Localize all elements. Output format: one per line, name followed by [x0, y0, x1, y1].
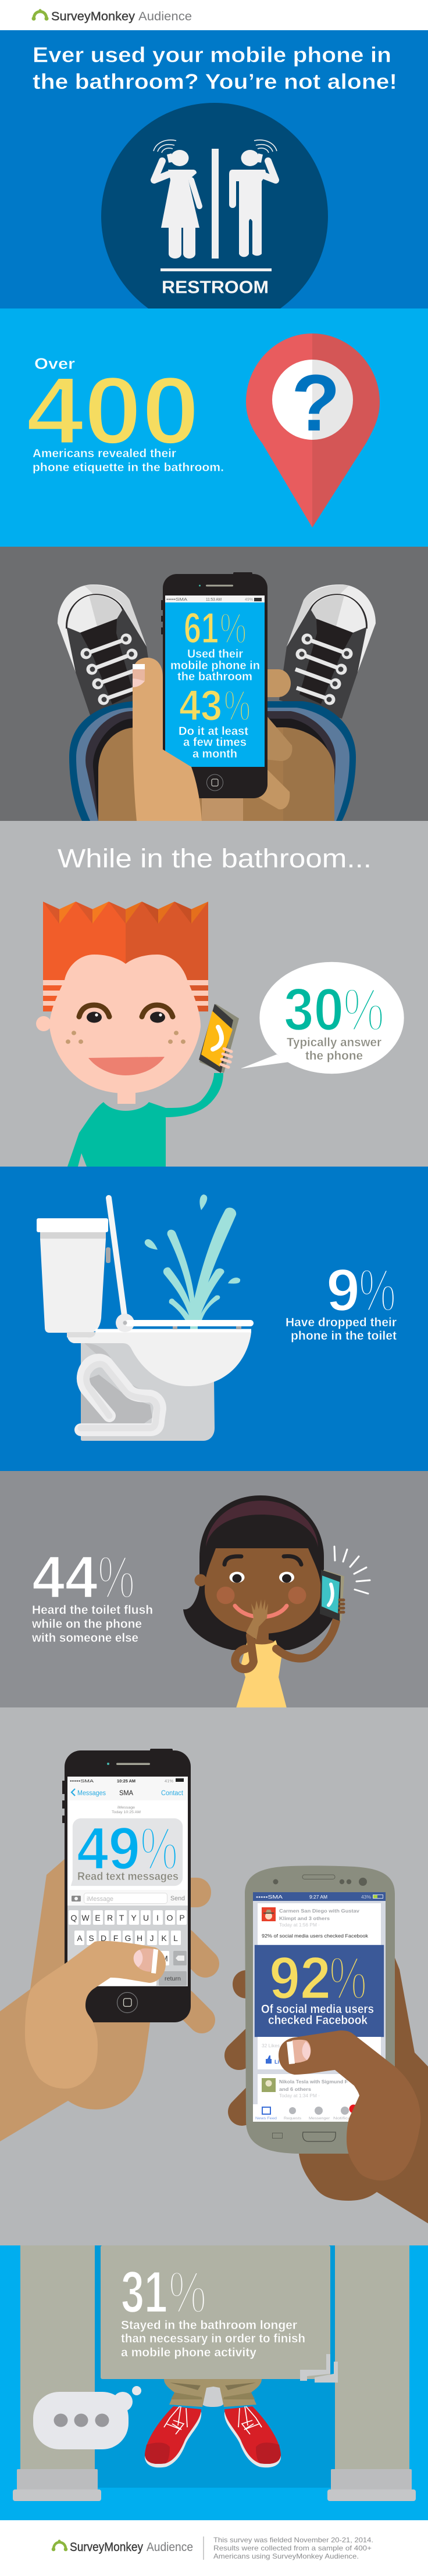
messages status bar: 41%: [165, 1778, 173, 1784]
stat: 9%: [286, 1257, 397, 1343]
hand thumb over the phone: [133, 658, 202, 821]
divider bar of the sign: [212, 149, 219, 259]
stat: 43%: a few times: [183, 736, 247, 749]
toilet seat and lid: [109, 1198, 254, 1332]
stat: 44%: with someone else: [31, 1631, 138, 1645]
character: red haired boy on phone: [36, 902, 239, 1167]
panel: title and restroom sign: [0, 30, 428, 308]
survey note: [213, 2536, 373, 2560]
facebook status bar: 43%: [361, 1895, 371, 1900]
features: [66, 1005, 186, 1075]
messages status bar: 10:25 AM: [117, 1778, 135, 1784]
hair: [43, 902, 208, 1028]
stat: 61%: Used their: [187, 648, 243, 661]
icon: woman with phone: [154, 140, 199, 259]
survey note: This survey was fielded November 20-21, 2014.: [213, 2536, 373, 2544]
keyboard: I: [156, 1913, 159, 1922]
post: carmen san diego: 92% of social media users checked Facebook: [262, 1933, 369, 1939]
face: [194, 1548, 321, 1634]
message bubble: 49%: 49: [77, 1815, 140, 1882]
keyboard: K: [161, 1933, 167, 1943]
phone: text messages: [62, 1749, 191, 2022]
post: nikola tesla: Nikola Tesla with Sigmund F: [279, 2079, 348, 2085]
stat: 43%: [179, 681, 251, 760]
post: carmen san diego: Carmen San Diego with Gustav: [279, 1908, 359, 1914]
keyboard: F: [113, 1933, 118, 1943]
header bar with SurveyMonkey logo: [0, 0, 428, 30]
post footer with likes: 32 Likes: [262, 2043, 280, 2048]
post footer with likes: Li: [274, 2059, 279, 2065]
survey note: Results were collected from a sample of 400+: [213, 2544, 372, 2552]
stat: 31%: a mobile phone activity: [121, 2346, 256, 2359]
teal shirt and arm: [67, 1073, 223, 1167]
legs and red shoes under door: [145, 2379, 281, 2467]
post: carmen san diego: Today at 1:56 PM ·: [279, 1922, 320, 1928]
panel: over 400 americans: [0, 308, 428, 547]
icon: map pin with question mark: ?: [291, 358, 340, 448]
face: [36, 955, 201, 1104]
facebook tab bar: Requests: [284, 2116, 302, 2121]
message bubble: 49%: Read text messages: [77, 1871, 179, 1883]
keyboard: S: [88, 1933, 94, 1943]
stat: 61%: [170, 604, 260, 683]
keyboard: L: [173, 1933, 178, 1943]
keyboard: R: [107, 1913, 113, 1922]
left stall pillar: [13, 2245, 101, 2501]
keyboard: E: [95, 1913, 101, 1922]
keyboard: G: [125, 1933, 131, 1943]
stat: 43%: %: [224, 681, 251, 730]
stat: 9%: %: [359, 1257, 396, 1325]
stat: 43%: a month: [192, 748, 237, 760]
restroom label: RESTROOM: [162, 277, 269, 297]
icon: monkey logo footer: [52, 2540, 67, 2551]
stat: 43%: 43: [179, 681, 222, 730]
post: nikola tesla: [258, 2074, 381, 2104]
headband: [206, 1501, 318, 1547]
keyboard: D: [101, 1933, 106, 1943]
facebook stat panel: 92%: [255, 1944, 384, 2037]
keyboard: T: [119, 1913, 124, 1922]
phone at the ear: [199, 1004, 239, 1073]
toilet tank: [37, 1218, 110, 1333]
character: woman covering her mouth on phone: [183, 1495, 370, 1708]
message bubble: 49%: %: [140, 1816, 178, 1883]
stat: 9%: phone in the toilet: [291, 1329, 397, 1343]
phone: facebook: [245, 1865, 395, 2154]
keyboard: O: [167, 1913, 173, 1922]
keyboard: A: [77, 1933, 83, 1943]
logo text: SurveyMonkey: [51, 10, 135, 23]
keyboard: return: [165, 1975, 181, 1982]
stat: 61%: 61: [184, 604, 219, 652]
facebook tab bar: News Feed: [255, 2116, 277, 2121]
arms and hand: [235, 1599, 336, 1669]
keyboard: J: [150, 1933, 154, 1943]
facebook tab bar: Messenger: [309, 2116, 330, 2121]
status bar: 11:53 AM: [206, 598, 222, 602]
stat: 61%: mobile phone in: [170, 659, 260, 672]
facebook status bar: 9:27 AM: [309, 1895, 327, 1900]
panel: while in the bathroom: [0, 821, 428, 1167]
facial features: [216, 1556, 306, 1617]
messages nav bar: Messages: [77, 1790, 106, 1797]
icon: left shoe: [58, 584, 154, 719]
messages status bar: •••••SMA: [70, 1778, 94, 1784]
status bar: 49%: [245, 598, 253, 602]
icon: man with phone: [229, 140, 277, 257]
messages nav bar: Contact: [161, 1790, 184, 1797]
facebook stat panel: 92%: 92: [269, 1944, 331, 2011]
survey note: Americans using SurveyMonkey Audience.: [213, 2552, 359, 2560]
facebook tab bar: Notifica: [333, 2116, 351, 2121]
stat: 9%: 9: [326, 1257, 360, 1323]
post: carmen san diego: Klimpt and 3 others: [279, 1915, 330, 1921]
logo text footer: SurveyMonkey: [70, 2541, 143, 2554]
facebook status bar: [256, 1895, 383, 1900]
title: Ever used your mobile phone in: [33, 43, 391, 67]
right stall pillar: [327, 2245, 416, 2501]
header bar with SurveyMonkey logo: Audience: [138, 10, 192, 23]
stat: 44%: %: [98, 1544, 135, 1612]
phone showing 61% and 43%: [161, 572, 268, 798]
post: nikola tesla: and 6 others: [279, 2086, 311, 2092]
status bar: •••••SMA: [166, 598, 187, 602]
status bar: [166, 598, 262, 602]
post: carmen san diego: [258, 1903, 381, 1945]
post footer with likes: [258, 2037, 381, 2069]
panel: toilet flush while on phone: [0, 1471, 428, 1708]
stat: 61%: the bathroom: [177, 670, 252, 683]
phone: text messages: iMessage: [117, 1806, 135, 1810]
dark skin thumb over phone: [279, 2030, 420, 2180]
facebook stat panel: 92%: Of social media users: [261, 2003, 374, 2016]
keyboard: M: [161, 1954, 168, 1963]
toilet bowl: [67, 1326, 251, 1386]
heading: While in the bathroom...: [58, 844, 372, 873]
stat: 44%: while on the phone: [31, 1617, 142, 1631]
icon: toilet with water splash: [37, 1194, 254, 1441]
neck: [250, 1633, 274, 1644]
icon: map pin with question mark: [246, 333, 380, 528]
stat: 61%: %: [220, 604, 247, 652]
speech bubble: 30%: the phone: [305, 1049, 363, 1063]
fingers behind the phone: [259, 669, 293, 809]
light skin hand behind phone: [0, 1859, 211, 2141]
stat: 31%: 31: [121, 2260, 167, 2325]
footer: Audience: [147, 2541, 193, 2554]
icon: monkey logo: [32, 9, 48, 20]
stat: 43%: Do it at least: [179, 725, 248, 738]
keyboard: P: [179, 1913, 185, 1922]
stat: over 400: Over: [34, 355, 76, 372]
message bubble: 49%: [71, 1815, 183, 1886]
panel: stayed in the stall longer: [0, 2245, 428, 2520]
keyboard: W: [81, 1913, 90, 1922]
panel: hands holding phones: [0, 1707, 428, 2245]
stat: 44%: [31, 1544, 153, 1645]
title: [33, 43, 397, 94]
toilet base: [81, 1343, 215, 1441]
water splash: [145, 1194, 240, 1330]
speech bubble: 30%: %: [343, 977, 384, 1044]
stat: 44%: Heard the toilet flush: [32, 1603, 153, 1617]
thought bubble: [33, 2386, 141, 2449]
door hinge: [300, 2354, 338, 2383]
stat: 31%: [121, 2259, 305, 2359]
keyboard: [67, 1906, 188, 1986]
dark skin hand behind phone: [233, 1958, 428, 2223]
icon: right shoe: [279, 584, 376, 719]
hair: [183, 1495, 336, 1650]
message input: [67, 1890, 188, 1906]
stat: over 400: Americans revealed their: [33, 447, 176, 460]
restroom sign: [101, 103, 328, 308]
phone and ringing lines: [320, 1547, 370, 1621]
stat: over 400: 400: [26, 357, 199, 464]
keyboard: H: [137, 1933, 142, 1943]
speech bubble: 30%: [241, 962, 404, 1074]
light skin thumb over phone: [25, 1941, 166, 2089]
stat: 31%: Stayed in the bathroom longer: [121, 2319, 297, 2332]
panel: dropped phone in toilet: [0, 1167, 428, 1471]
keyboard: Y: [131, 1913, 137, 1922]
stall door: [101, 2245, 338, 2383]
stat: over 400: phone etiquette in the bathroom.: [33, 461, 224, 474]
facebook tab bar: [253, 2104, 386, 2122]
stat: 44%: 44: [32, 1544, 98, 1610]
messages status bar: [70, 1778, 184, 1784]
message input: Send: [170, 1895, 185, 1902]
post: nikola tesla: Today at 1:34 PM ·: [279, 2093, 320, 2098]
lowered trousers and legs: [69, 701, 356, 821]
keyboard: Q: [71, 1913, 77, 1922]
yellow dress: [236, 1640, 287, 1708]
stat: 31%: %: [169, 2259, 206, 2326]
stat: 31%: than necessary in order to finish: [121, 2332, 305, 2345]
phone: text messages: Today 10:25 AM: [112, 1810, 141, 1814]
speech bubble: 30%: Typically answer: [287, 1036, 381, 1049]
footer: [0, 2520, 428, 2576]
message input: iMessage: [87, 1896, 113, 1903]
facebook stat panel: 92%: %: [329, 1945, 367, 2012]
keyboard: U: [143, 1913, 149, 1922]
facebook status bar: •••••SMA: [256, 1895, 283, 1900]
speech bubble: 30%: 30: [284, 976, 344, 1043]
messages nav bar: SMA: [119, 1790, 133, 1797]
panel: phone between shoes: [0, 547, 428, 821]
messages nav bar: [72, 1789, 184, 1797]
facebook stat panel: 92%: checked Facebook: [268, 2014, 368, 2027]
stat: 9%: Have dropped their: [286, 1316, 397, 1329]
title: the bathroom? You’re not alone!: [33, 70, 397, 94]
